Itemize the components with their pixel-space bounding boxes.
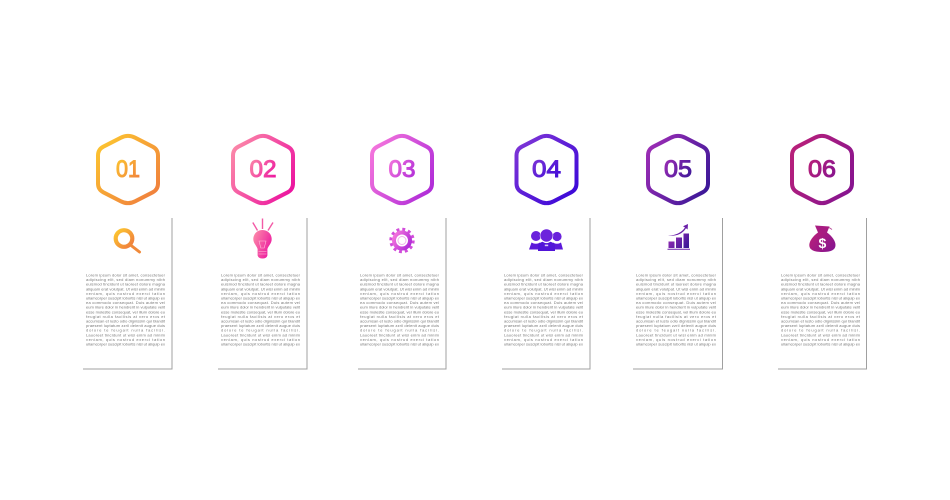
card 5 text: ea commodo consequat. Duis autem vel [636,300,716,305]
card 6 text: Lauoreet tincidunt ut wisi enim ad minim [781,332,861,337]
card 3 edge [358,218,446,369]
card 3 text: ullamcorper suscipit lobortis nisl ut aliquip ex [360,296,439,300]
card 3 text: esse molestie consequat, vel illum dolore eu [360,309,439,314]
card 4 text: ullamcorper suscipit lobortis nisl ut aliquip ex [504,342,583,346]
card 6 edge [778,218,866,369]
card 1 text: veniam, quis nostrud exerci tation [86,337,165,342]
card 3 text: aliquam erat volutpat. Ut wisi enim ad minim [360,286,440,291]
card 1 text: Lauoreet tincidunt ut wisi enim ad minim [86,332,166,337]
card 2 text [221,272,301,346]
card 5 text: esse molestie consequat, vel illum dolore eu [636,309,716,314]
card 1 text: aliquam erat volutpat. Ut wisi enim ad minim [86,286,166,291]
hexagon 4 [516,136,576,203]
card 6 text: Lorem ipsum dolor sit amet, consectetuer [781,272,861,278]
card 4 text: veniam, quis nostrud exerci tation [504,337,583,342]
card 2 text: accumsan et iusto odio dignissim qui blandit [221,318,301,324]
hexagon 5 [648,136,708,203]
number 01: 01 [116,156,140,183]
card 2 text: ullamcorper suscipit lobortis nisl ut aliquip ex [221,342,300,346]
icon: magnifier [116,230,140,252]
number 05: 05 [664,156,692,183]
card 4 text: dolore te feugait nulla facilisi. [504,328,583,333]
card 4 text: aliquam erat volutpat. Ut wisi enim ad minim [504,286,584,291]
card 2 edge [218,218,307,369]
card 2 text: adipiscing elit, sed diam nonummy nibh [221,277,300,282]
card 3 text: adipiscing elit, sed diam nonummy nibh [360,277,439,282]
card 6 text: veniam, quis nostrud exerci tation [781,291,860,296]
card 6 text: ea commodo consequat. Duis autem vel [781,300,860,305]
card 1 text: veniam, quis nostrud exerci tation [86,291,165,296]
card 3 text: accumsan et iusto odio dignissim qui blandit [360,318,440,324]
card 2 text: ullamcorper suscipit lobortis nisl ut aliquip ex [221,296,300,300]
card 4 text: accumsan et iusto odio dignissim qui blandit [504,318,584,324]
card 1 text: accumsan et iusto odio dignissim qui blandit [86,318,166,324]
card 3 text: ea commodo consequat. Duis autem vel [360,300,439,305]
card 6 text [781,272,861,346]
card 4 text: praesent luptatum zzril delenit augue duis [504,323,583,328]
number 02: 02 [250,156,276,183]
card 6 text: adipiscing elit, sed diam nonummy nibh [781,277,860,282]
card 3 text [360,272,440,346]
card 2 text: praesent luptatum zzril delenit augue duis [221,323,300,328]
card 4 text: euismod tincidunt ut laoreet dolore magna [504,282,584,287]
card 6 text: dolore te feugait nulla facilisi. [781,328,860,333]
hexagon 2 [233,136,293,203]
card 4 text: ullamcorper suscipit lobortis nisl ut aliquip ex [504,296,583,300]
card 4 text [504,272,584,346]
card 5 text: dolore te feugait nulla facilisi. [636,328,716,333]
card 5 text: adipiscing elit, sed diam nonummy nibh [636,277,716,282]
card 1 text: praesent luptatum zzril delenit augue duis [86,323,165,328]
card 5 text: eum iriure dolor in hendrerit in vulputate velit [636,305,717,310]
card 5 text: ullamcorper suscipit lobortis nisl ut aliquip ex [636,296,716,300]
card 6 text: aliquam erat volutpat. Ut wisi enim ad minim [781,286,861,291]
card 6 text: praesent luptatum zzril delenit augue duis [781,323,860,328]
card 5 text: veniam, quis nostrud exerci tation [636,291,716,296]
card 6 text: feugiat nulla facilisis at vero eros et [781,314,861,319]
card 1 text [86,272,166,346]
step 3 [358,136,446,369]
icon: money bag: $ [819,235,827,251]
card 3 text: feugiat nulla facilisis at vero eros et [360,314,440,319]
card 3 text: praesent luptatum zzril delenit augue duis [360,323,439,328]
step 6 [778,136,866,369]
icon: team of people [529,229,563,251]
card 1 text: dolore te feugait nulla facilisi. [86,328,165,333]
card 5 text: ullamcorper suscipit lobortis nisl ut aliquip ex [636,342,716,346]
step 5 [633,136,722,369]
card 4 text: Lauoreet tincidunt ut wisi enim ad minim [504,332,584,337]
card 4 text: eum iriure dolor in hendrerit in vulputate velit [504,305,584,310]
card 1 text: Lorem ipsum dolor sit amet, consectetuer [86,272,166,278]
card 3 text: Lorem ipsum dolor sit amet, consectetuer [360,272,440,278]
card 5 text: praesent luptatum zzril delenit augue duis [636,323,716,328]
card 5 edge [633,218,722,369]
card 1 text: ea commodo consequat. Duis autem vel [86,300,165,305]
card 1 text: eum iriure dolor in hendrerit in vulputate velit [86,305,166,310]
card 6 text: ullamcorper suscipit lobortis nisl ut aliquip ex [781,296,860,300]
card 3 text: veniam, quis nostrud exerci tation [360,291,439,296]
card 2 text: aliquam erat volutpat. Ut wisi enim ad minim [221,286,301,291]
card 2 text: veniam, quis nostrud exerci tation [221,337,300,342]
card 6 text: ullamcorper suscipit lobortis nisl ut aliquip ex [781,342,860,346]
hexagon 1 [98,136,158,203]
card 5 text: Lauoreet tincidunt ut wisi enim ad minim [636,332,717,337]
card 6 text: veniam, quis nostrud exerci tation [781,337,860,342]
step 2 [218,136,307,369]
card 3 text: Lauoreet tincidunt ut wisi enim ad minim [360,332,440,337]
card 4 text: veniam, quis nostrud exerci tation [504,291,583,296]
icon: money bag [809,226,836,252]
card 5 text: Lorem ipsum dolor sit amet, consectetuer [636,272,717,278]
card 3 text: ullamcorper suscipit lobortis nisl ut aliquip ex [360,342,439,346]
card 3 text: veniam, quis nostrud exerci tation [360,337,439,342]
number 03: 03 [388,156,416,183]
card 2 text: euismod tincidunt ut laoreet dolore magna [221,282,301,287]
card 4 text: adipiscing elit, sed diam nonummy nibh [504,277,583,282]
card 2 text: eum iriure dolor in hendrerit in vulputate velit [221,305,301,310]
card 1 edge [83,218,172,369]
card 5 text: euismod tincidunt ut laoreet dolore magna [636,282,717,287]
card 3 text: dolore te feugait nulla facilisi. [360,328,439,333]
card 5 text: accumsan et iusto odio dignissim qui blandit [636,318,717,324]
card 1 text: euismod tincidunt ut laoreet dolore magna [86,282,166,287]
hexagon 6 [792,136,852,203]
card 4 text: Lorem ipsum dolor sit amet, consectetuer [504,272,584,278]
card 5 text: feugiat nulla facilisis at vero eros et [636,314,717,319]
icon: rising bar chart [668,224,690,249]
card 2 text: esse molestie consequat, vel illum dolore eu [221,309,300,314]
card 1 text: feugiat nulla facilisis at vero eros et [86,314,166,319]
card 2 text: dolore te feugait nulla facilisi. [221,328,300,333]
number 04: 04 [532,156,561,183]
card 3 text: euismod tincidunt ut laoreet dolore magna [360,282,440,287]
card 5 text [636,272,717,346]
card 6 text: euismod tincidunt ut laoreet dolore magna [781,282,861,287]
card 2 text: veniam, quis nostrud exerci tation [221,291,300,296]
card 6 text: esse molestie consequat, vel illum dolore eu [781,309,860,314]
step 1 [83,136,172,369]
card 1 text: ullamcorper suscipit lobortis nisl ut aliquip ex [86,296,165,300]
card 4 text: ea commodo consequat. Duis autem vel [504,300,583,305]
card 2 text: Lorem ipsum dolor sit amet, consectetuer [221,272,301,278]
card 4 edge [502,218,590,369]
card 3 text: eum iriure dolor in hendrerit in vulputate velit [360,305,440,310]
card 1 text: esse molestie consequat, vel illum dolore eu [86,309,165,314]
step 4 [502,136,590,369]
card 2 text: ea commodo consequat. Duis autem vel [221,300,300,305]
card 6 text: accumsan et iusto odio dignissim qui blandit [781,318,861,324]
icon: light bulb [253,218,273,258]
icon: gear [391,229,413,252]
hexagon 3 [372,136,432,203]
card 1 text: ullamcorper suscipit lobortis nisl ut aliquip ex [86,342,165,346]
card 2 text: Lauoreet tincidunt ut wisi enim ad minim [221,332,301,337]
card 6 text: eum iriure dolor in hendrerit in vulputate velit [781,305,861,310]
card 4 text: esse molestie consequat, vel illum dolore eu [504,309,583,314]
card 2 text: feugiat nulla facilisis at vero eros et [221,314,301,319]
number 06: 06 [808,156,836,183]
card 5 text: aliquam erat volutpat. Ut wisi enim ad minim [636,286,717,291]
card 1 text: adipiscing elit, sed diam nonummy nibh [86,277,165,282]
card 5 text: veniam, quis nostrud exerci tation [636,337,716,342]
card 4 text: feugiat nulla facilisis at vero eros et [504,314,584,319]
